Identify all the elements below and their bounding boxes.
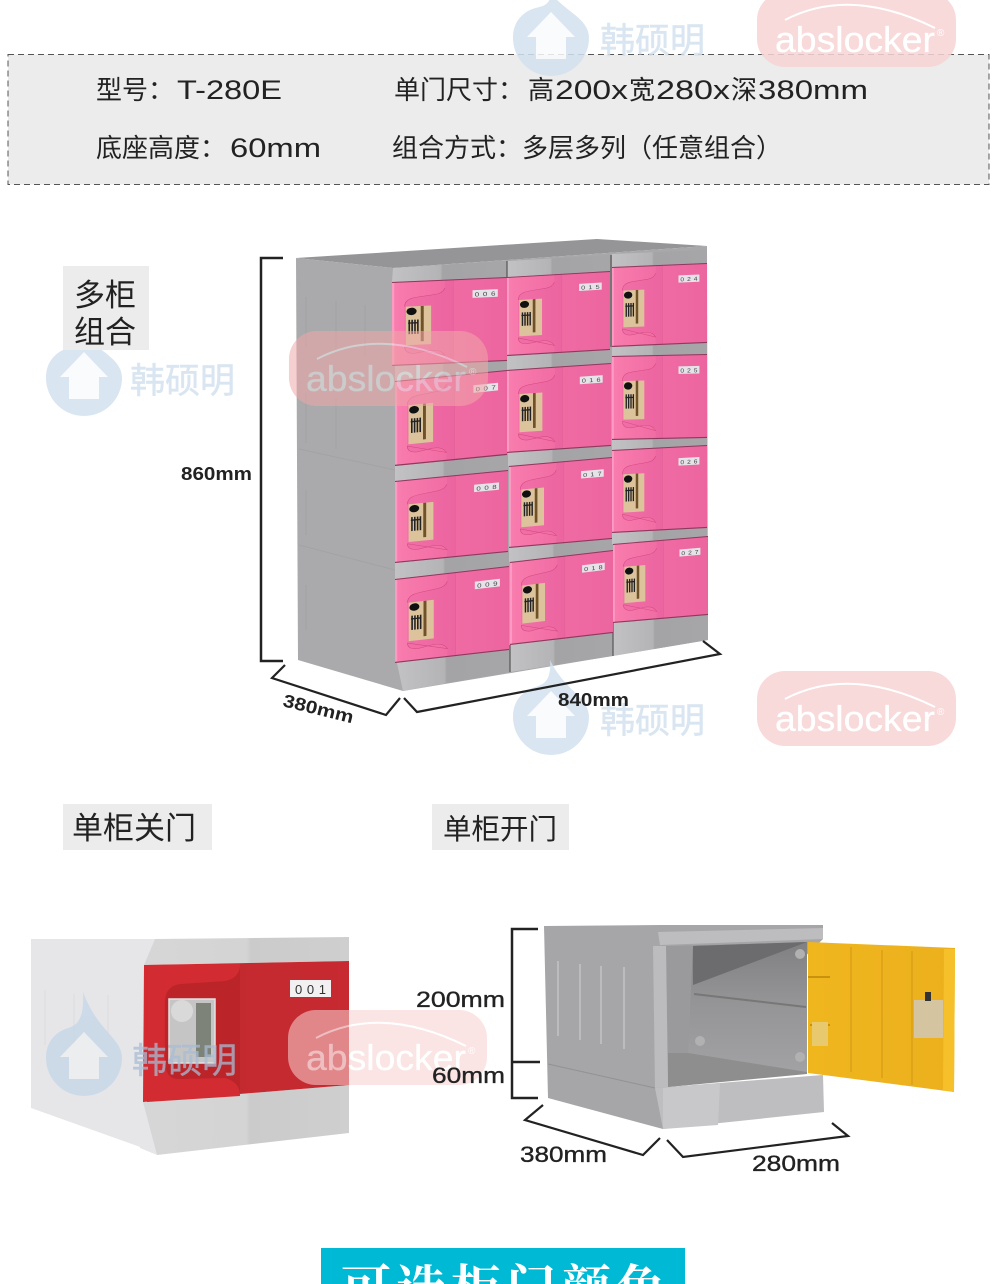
spec: model: 型号：	[96, 75, 174, 105]
dimension: height 860mm	[181, 258, 283, 661]
watermark: abslocker top	[757, 0, 956, 67]
door 017: 017	[583, 471, 602, 479]
label: single closed: 单柜关门	[72, 811, 196, 846]
door 008: 008	[476, 485, 497, 492]
doors column 2	[507, 271, 613, 645]
door 018: 018	[584, 565, 603, 573]
multi-locker photo	[296, 239, 708, 691]
watermark: abslocker middle	[289, 331, 488, 406]
door 006	[392, 277, 507, 366]
watermark: logo lower right: 韩硕明	[600, 693, 705, 744]
yellow door	[808, 942, 955, 1092]
frame left	[653, 946, 668, 1088]
spec: door size: 深	[731, 75, 757, 105]
door 027	[613, 536, 708, 623]
spec panel	[8, 54, 989, 184]
closed locker photo	[31, 937, 349, 1155]
spec: base height: 底座高度：	[96, 133, 226, 163]
watermark: abslocker lower right: ®	[937, 707, 945, 718]
dimension: height 860mm: 860mm	[181, 464, 252, 484]
dimension: 200mm and 60mm: 200mm	[416, 987, 505, 1012]
spec: door size	[394, 75, 868, 105]
label: multi-locker: 多柜	[74, 278, 136, 313]
label: single open: 单柜开门	[443, 814, 557, 846]
door 026	[612, 445, 707, 533]
watermark: logo middle left: 韩硕明	[130, 353, 235, 404]
door 016: 016	[582, 377, 601, 385]
door 024	[612, 263, 707, 347]
label: multi-locker: 组合	[74, 315, 136, 350]
spec: door size: 宽	[629, 75, 655, 105]
door 025	[612, 354, 707, 440]
dimension: depth 380mm	[272, 665, 400, 727]
dimension: 200mm and 60mm	[416, 929, 540, 1098]
door 007	[395, 370, 507, 466]
watermark: abslocker bottom: ®	[468, 1046, 476, 1057]
number plate 001	[290, 980, 331, 997]
locker front frame	[393, 246, 708, 691]
doors column 3	[612, 263, 708, 623]
bottom band	[655, 1075, 824, 1129]
dimension: depth 380mm single: 380mm	[520, 1142, 607, 1167]
open locker photo	[544, 925, 955, 1129]
interior	[666, 942, 807, 1087]
watermark: logo bottom left	[46, 992, 237, 1096]
spec: base height: 60mm	[230, 133, 321, 163]
spec: door size: 高	[528, 75, 554, 105]
dimension: 200mm and 60mm: 60mm	[432, 1063, 505, 1088]
watermark: abslocker bottom: abslocker	[306, 1037, 466, 1078]
left face	[31, 939, 157, 1153]
handle	[169, 999, 215, 1063]
door 018	[510, 550, 613, 645]
door 016	[507, 363, 611, 453]
spec: base height	[96, 133, 321, 163]
red door	[143, 961, 349, 1102]
spec: combination: 组合方式：多层多列（任意组合）	[392, 133, 782, 163]
door 025: 025	[680, 368, 698, 374]
door 007: 007	[476, 385, 496, 393]
spec: door size: 280x	[656, 75, 731, 105]
dimension: width 840mm	[404, 641, 720, 712]
watermark: abslocker top: ®	[937, 28, 945, 39]
dimension: width 280mm	[667, 1123, 848, 1176]
number plate 001: 001	[295, 982, 326, 997]
door 009: 009	[477, 581, 498, 589]
spec: door size: 380mm	[758, 75, 868, 105]
door 015	[507, 271, 610, 356]
front bottom band	[143, 1085, 349, 1155]
watermark: abslocker middle: abslocker	[306, 358, 466, 399]
watermark: logo top	[513, 0, 705, 76]
spec: model: T-280E	[177, 75, 282, 105]
dimension: depth 380mm single	[520, 1105, 660, 1167]
label: multi-locker	[63, 266, 149, 350]
door 006: 006	[475, 291, 496, 298]
locker side	[296, 258, 403, 691]
dimension: width 280mm: 280mm	[752, 1151, 840, 1176]
watermark: logo lower right	[513, 660, 705, 755]
label: single open	[432, 804, 569, 850]
watermark: abslocker top: abslocker	[775, 19, 935, 60]
watermark: logo top: 韩硕明	[600, 13, 705, 64]
door 027: 027	[681, 549, 699, 557]
door 024: 024	[680, 276, 698, 283]
watermark: abslocker middle: ®	[469, 367, 477, 378]
frame top band	[658, 928, 823, 945]
door 008	[395, 470, 508, 563]
door 017	[509, 457, 612, 548]
watermark: logo middle left	[46, 332, 235, 416]
watermark: logo bottom left: 韩硕明	[132, 1033, 237, 1084]
watermark: abslocker lower right	[757, 671, 956, 746]
door 015: 015	[581, 284, 600, 291]
spec: door size: 200x	[555, 75, 629, 105]
label: single closed	[63, 804, 212, 850]
lock	[914, 1000, 943, 1038]
spec: door size: 单门尺寸：	[394, 75, 524, 105]
doors column 1	[392, 277, 509, 663]
locker top	[296, 239, 707, 268]
dimension: width 840mm: 840mm	[558, 690, 629, 710]
watermark: abslocker lower right: abslocker	[775, 698, 935, 739]
dimension: depth 380mm: 380mm	[281, 690, 356, 727]
door 009	[395, 566, 509, 663]
door 026: 026	[680, 459, 698, 466]
front top band	[144, 937, 349, 965]
spec: model	[96, 75, 282, 105]
side face	[544, 925, 823, 1129]
watermark: abslocker bottom	[288, 1010, 487, 1085]
